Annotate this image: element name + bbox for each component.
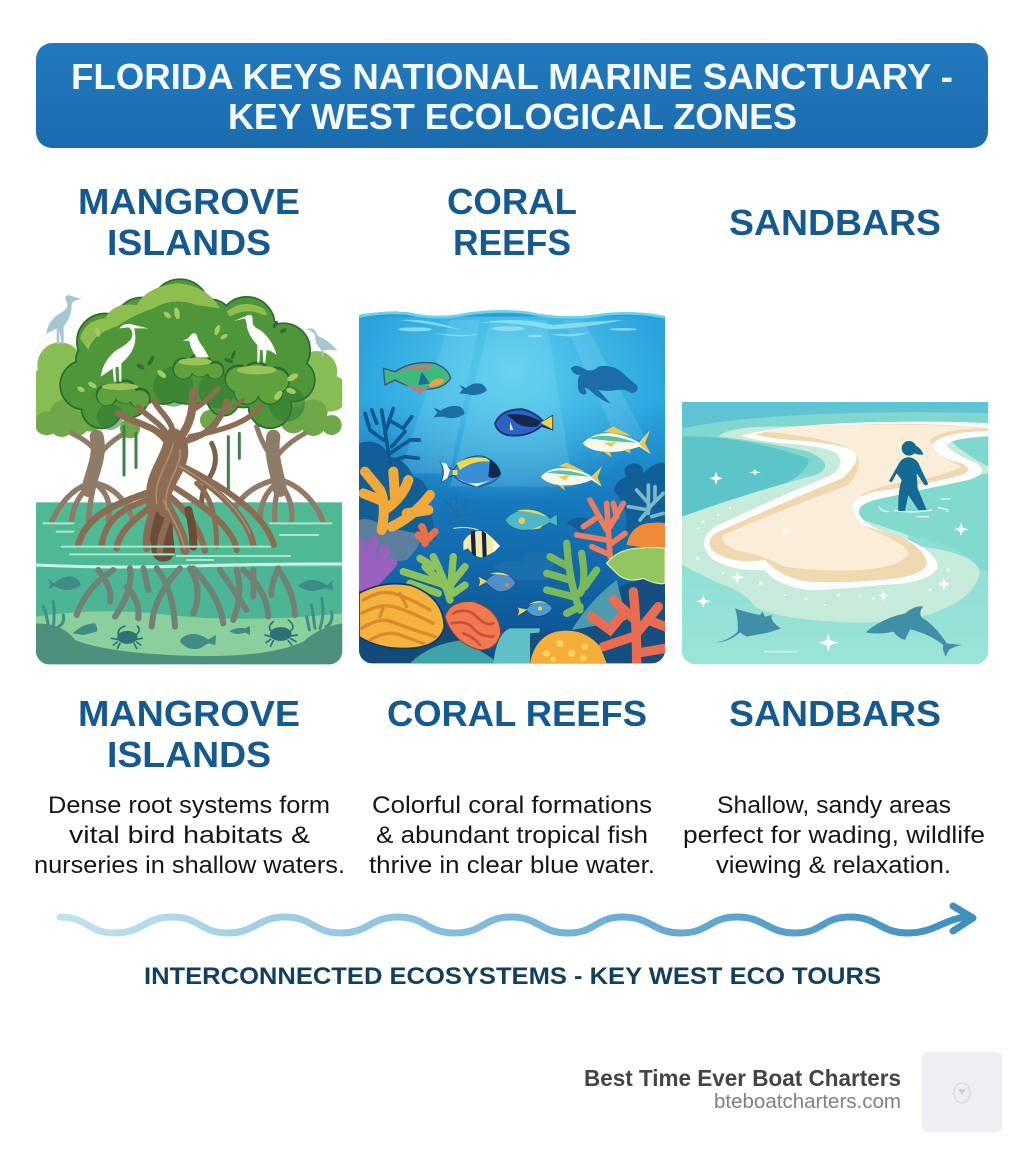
fish and crabs [47,576,334,649]
caption: INTERCONNECTED ECOSYSTEMS - KEY WEST ECO TOURS [144,963,881,990]
turquoise fish [505,509,557,530]
panel: mangrove illustration [32,280,348,667]
seagrass [43,598,332,630]
heading: coral reefs: CORAL [447,181,577,222]
underwater roots [77,568,295,627]
description: sandbars: viewing & relaxation. [716,852,951,879]
shallow water [682,402,988,665]
label: mangrove islands: MANGROVE [78,693,300,734]
wavy arrow [60,906,973,933]
manta ray [712,608,781,642]
main trunk and roots [78,388,274,551]
branching orange coral [363,472,430,530]
description: mangrove islands: Dense root systems form [48,792,330,819]
yellow bubble coral [530,631,607,663]
label: coral reefs: CORAL REEFS [387,693,647,734]
sparkles [696,469,968,652]
description: coral reefs: thrive in clear blue water. [369,852,655,879]
canopy highlights [80,283,267,350]
description: coral reefs [369,792,655,879]
foliage tufts [96,353,290,409]
heading: mangrove islands [78,181,300,263]
description: sandbars: Shallow, sandy areas [717,792,951,819]
water surface [36,502,342,567]
title banner [36,43,988,148]
brand name and website: Best Time Ever Boat Charters [584,1065,901,1091]
small blue yellow fish [517,601,552,617]
purple tube coral [360,542,392,587]
person wading [889,441,928,511]
labels row [78,693,941,775]
red brain coral [445,602,501,650]
description: coral reefs: Colorful coral formations [372,792,652,819]
heading: coral reefs [447,181,577,263]
pale shallows around sand [682,425,980,623]
title banner: KEY WEST ECOLOGICAL ZONES [228,96,797,137]
ripples [765,499,950,652]
dolphin [866,606,962,657]
heading: mangrove islands: MANGROVE [78,181,300,222]
yellowtail fish lower [541,463,602,491]
blue tang [495,409,552,436]
description: mangrove islands: nurseries in shallow waters. [34,852,345,879]
silhouette fish and turtle [433,366,638,418]
back trees [32,342,348,522]
water surface [359,310,665,316]
reef rock [359,519,420,567]
yellowtail fish upper [583,427,651,457]
brain coral [359,584,444,649]
background coral silhouettes [359,442,665,580]
description: coral reefs: & abundant tropical fish [376,822,648,849]
wet sand [709,424,988,582]
panel: sandbar illustration [682,402,988,665]
logo placeholder [922,1052,1002,1132]
orange round coral [626,522,665,548]
striped angelfish [453,527,500,557]
background birds [46,295,337,357]
egrets in canopy [101,315,277,382]
label: sandbars: SANDBARS [729,693,941,734]
green branching coral [403,557,465,600]
label: mangrove islands [78,693,300,775]
description: mangrove islands: vital bird habitats & [69,822,310,849]
leaves [76,307,299,401]
panel: coral reef illustration [357,307,667,667]
deep water band [682,402,988,428]
small blue fish [478,572,516,592]
brand name and website [584,1065,901,1113]
heading: mangrove islands: ISLANDS [107,222,271,263]
light rays [400,320,647,487]
water ripples [43,523,332,560]
heading: sandbars: SANDBARS [729,202,941,243]
right green coral [547,543,597,613]
description: sandbars: perfect for wading, wildlife [683,822,985,849]
water background [359,310,665,667]
dry sand [722,425,985,570]
red branch coral [592,592,665,663]
brand name and website: bteboatcharters.com [714,1091,901,1113]
underwater [36,567,342,667]
sand outer white edge [704,422,988,590]
label: mangrove islands: ISLANDS [107,734,271,775]
green plate coral [607,547,665,584]
title banner: FLORIDA KEYS NATIONAL MARINE SANCTUARY - [71,56,953,97]
powder blue tang [441,456,501,487]
parrotfish [383,363,451,393]
small coral [418,527,435,543]
salmon coral branch [577,500,625,557]
heading: coral reefs: REEFS [453,222,571,263]
description: mangrove islands [34,792,345,879]
aerial roots [124,427,239,490]
main tree canopy [61,280,314,430]
right water inlet and pocket [848,473,988,572]
description: sandbars [683,792,985,879]
